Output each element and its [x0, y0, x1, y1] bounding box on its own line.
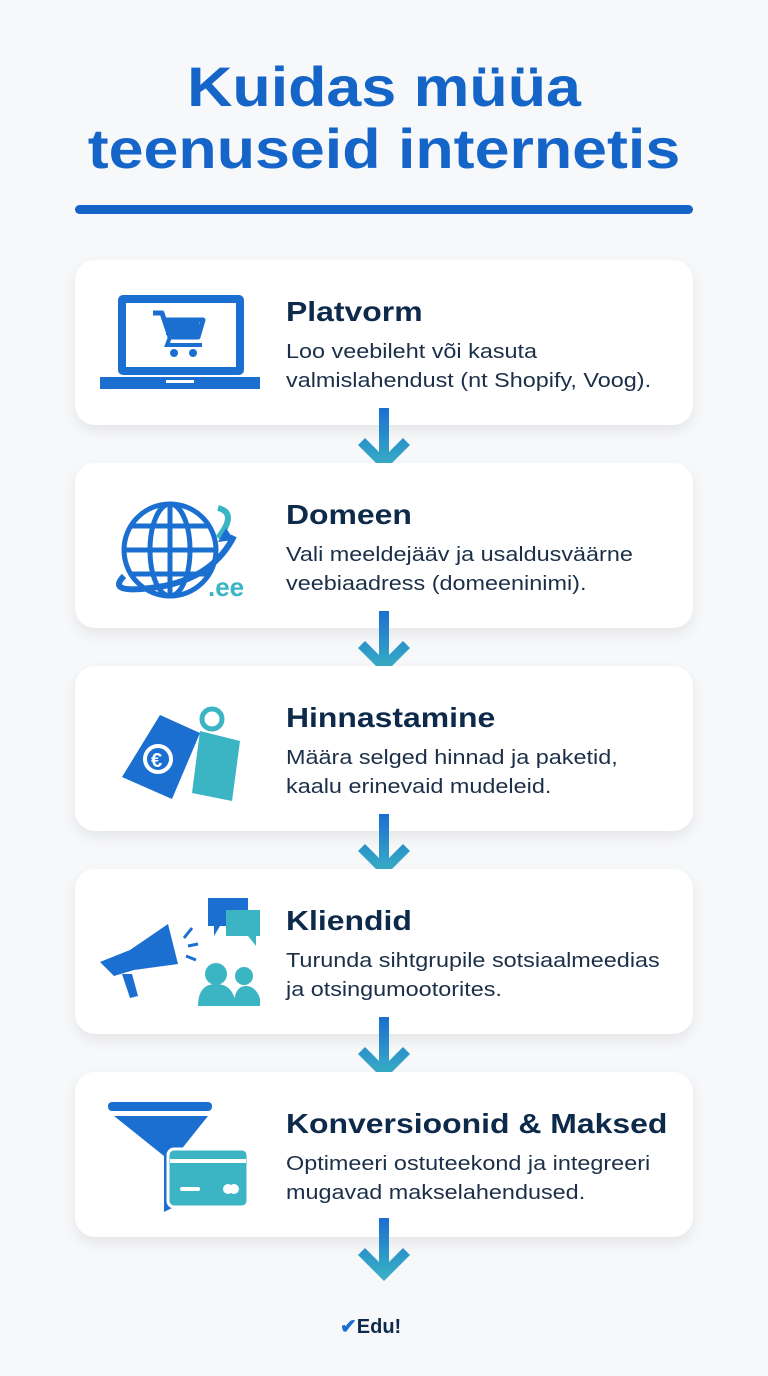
- title: [88, 55, 680, 180]
- panel: konversioonid: Konversioonid & Maksed: [286, 1108, 667, 1139]
- panel: hinnastamine: kaalu erinevaid mudeleid.: [286, 776, 551, 798]
- arrow: [358, 611, 410, 666]
- title: teenuseid internetis: [88, 117, 680, 180]
- panel: kliendid: Turunda sihtgrupile sotsiaalmeedias: [286, 950, 660, 972]
- panel: platvorm: valmislahendust (nt Shopify, Voog).: [286, 370, 651, 392]
- panel: kliendid: ja otsingumootorites.: [286, 979, 502, 1001]
- panel: domeen: Domeen: [286, 499, 412, 530]
- title: Kuidas müüa: [187, 55, 581, 118]
- panel: platvorm: Platvorm: [286, 296, 423, 327]
- icon: price tags: €: [151, 750, 162, 772]
- icon: price tags: [122, 706, 240, 801]
- panel: kliendid: Kliendid: [286, 905, 412, 936]
- panel: platvorm: [75, 260, 693, 425]
- arrow: [358, 1017, 410, 1072]
- panel: hinnastamine: Määra selged hinnad ja paketid,: [286, 747, 618, 769]
- panel: kliendid: [75, 869, 693, 1034]
- panel: domeen: [75, 463, 693, 628]
- icon: globe: [116, 502, 244, 602]
- arrow: [358, 1218, 410, 1281]
- icon: megaphone people: [100, 898, 260, 1006]
- panel: domeen: Vali meeldejääv ja usaldusväärne: [286, 544, 633, 566]
- icon: laptop cart: [100, 295, 260, 389]
- panel: konversioonid: [75, 1072, 693, 1237]
- panel: hinnastamine: Hinnastamine: [286, 702, 495, 733]
- panel: hinnastamine: [75, 666, 693, 831]
- panel: konversioonid: Optimeeri ostuteekond ja integreeri: [286, 1153, 650, 1175]
- icon: funnel card: [108, 1102, 246, 1212]
- panel: konversioonid: mugavad makselahendused.: [286, 1182, 585, 1204]
- arrow: [358, 408, 410, 463]
- arrow: [358, 814, 410, 869]
- panel: domeen: veebiaadress (domeeninimi).: [286, 573, 586, 595]
- icon: globe: .ee: [208, 572, 244, 602]
- panel: platvorm: Loo veebileht või kasuta: [286, 341, 537, 363]
- footer: Edu: ✔Edu!: [340, 1316, 401, 1338]
